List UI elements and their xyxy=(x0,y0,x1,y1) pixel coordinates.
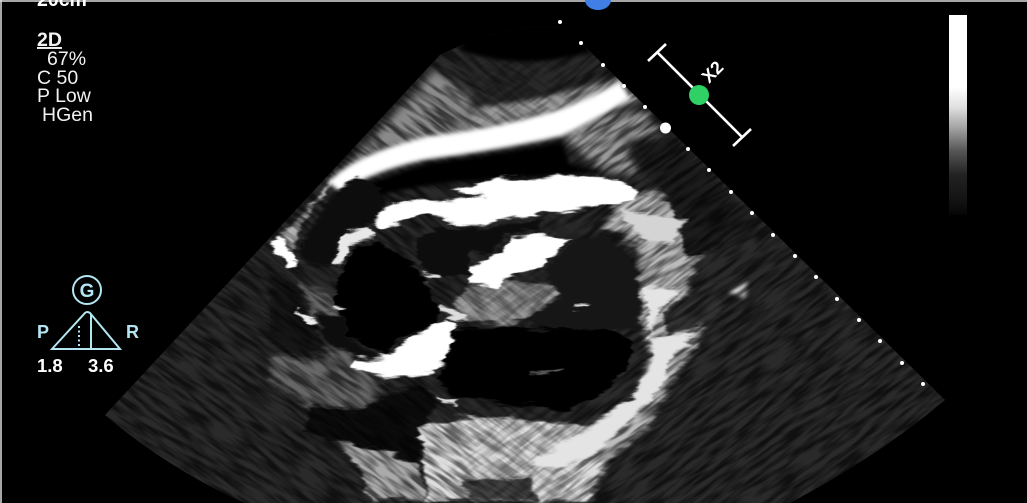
icon: blue probe marker xyxy=(585,0,611,10)
bright speck right field xyxy=(728,282,748,298)
RVOT dark xyxy=(417,220,547,278)
text: harmonic: HGen xyxy=(42,104,93,126)
upper left wall xyxy=(332,227,373,267)
text: imaging settings xyxy=(37,29,93,126)
text: gain: 67% xyxy=(47,48,86,70)
text: power: P Low xyxy=(37,85,92,107)
scan line texture left xyxy=(108,46,590,503)
left gray wall xyxy=(270,280,387,423)
text: compression: C 50 xyxy=(37,67,78,89)
icon: probe orientation xyxy=(37,276,139,349)
near-field black cap xyxy=(460,26,590,63)
right upper chamber gray xyxy=(527,233,642,330)
right ring wall xyxy=(530,190,703,500)
central white structure xyxy=(468,235,570,287)
left atrium black xyxy=(335,242,440,353)
left edge reverberation xyxy=(270,170,338,267)
lower left dark pocket xyxy=(303,383,437,470)
left edge bright xyxy=(270,237,298,265)
label P: P xyxy=(37,322,49,342)
heart cross-section xyxy=(270,176,697,470)
icon: dotted centre line xyxy=(78,326,80,346)
pericardial bright band xyxy=(328,82,630,192)
bottom gray-white mass xyxy=(420,417,603,500)
lower gray band xyxy=(337,440,427,500)
top white structure xyxy=(372,176,638,228)
right wall highlights xyxy=(530,283,697,470)
value left: 1.8 xyxy=(37,355,63,376)
value right: 3.6 xyxy=(88,355,114,376)
left upper dark column xyxy=(298,177,385,267)
zoom dot xyxy=(689,85,709,105)
text: 2D mode: 2D xyxy=(37,29,62,51)
zoom label: X2 xyxy=(698,57,727,87)
sector edge dots xyxy=(558,20,925,386)
ultrasound sector image xyxy=(105,26,945,503)
heart soft tissue xyxy=(270,170,720,500)
icon: scan triangle xyxy=(52,312,120,349)
grayscale bar xyxy=(949,15,967,215)
gray fill between chambers xyxy=(450,282,567,324)
near-field gray tissue xyxy=(338,52,752,246)
icon: G circle xyxy=(73,276,101,304)
left outer dark xyxy=(270,267,330,357)
main chamber black xyxy=(437,327,633,410)
septum white xyxy=(350,318,457,377)
label R: R xyxy=(126,322,139,342)
scan line texture right xyxy=(452,52,944,503)
zoom marker xyxy=(648,44,751,146)
dark band below bright line xyxy=(372,142,602,196)
G label: G xyxy=(80,281,94,302)
right exterior dark xyxy=(664,191,709,259)
